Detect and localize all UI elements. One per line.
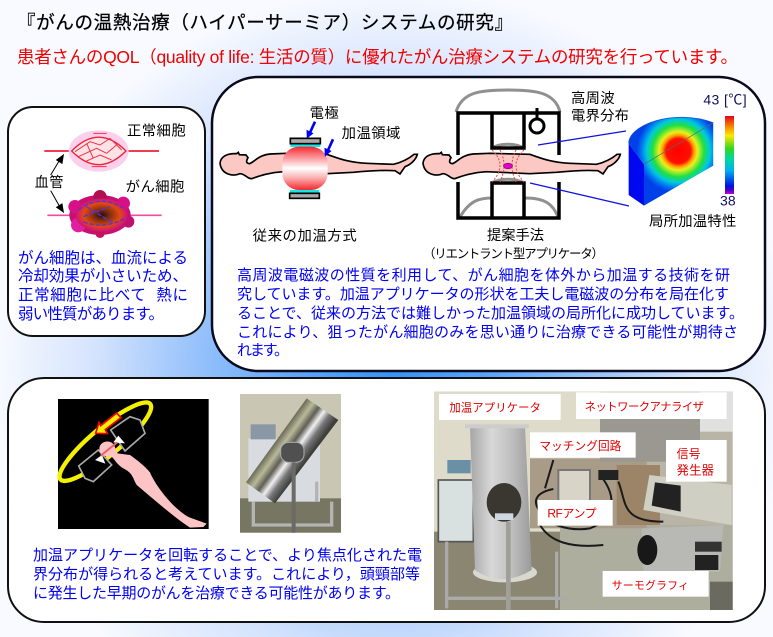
text: heating description: れます。	[237, 342, 289, 359]
title: 『がんの温熱治療（ハイパーサーミア）システムの研究』	[17, 12, 513, 33]
label: heating region: 加温領域	[342, 125, 400, 142]
RF amp and cables	[536, 460, 663, 546]
rotation ring	[51, 393, 159, 490]
caption: proposed method: （リエントラント型アプリケータ）	[423, 247, 604, 261]
callout: signal generator: 発生器	[677, 463, 715, 477]
text: heating description	[237, 266, 744, 359]
thermography camera	[637, 525, 723, 573]
rotation arrow	[96, 413, 121, 434]
image: rotation schematic	[51, 393, 209, 529]
text: rotation description: 界分布が得られると考えています。これにより，頭頸部等	[33, 565, 420, 583]
panel: rotating applicator	[8, 378, 765, 622]
cancer cell	[47, 190, 162, 238]
text: cancer cell explanation: がん細胞は、血流による	[18, 249, 188, 267]
callout: RF amplifier: RFアンプ	[547, 506, 597, 520]
label: cancer cell: がん細胞	[126, 179, 184, 196]
heating region	[282, 147, 328, 190]
patient body	[220, 152, 417, 179]
oscilloscope	[643, 475, 732, 525]
label: RF field	[571, 90, 629, 125]
subtitle: 患者さんのQOL（quality of life: 生活の質）に優れたがん治療システムの研究を行っています。	[17, 47, 738, 67]
diagram: proposed re-entrant applicator	[423, 90, 629, 261]
text: rotation description: 加温アプリケータを回転することで、より焦点化された電	[33, 547, 422, 564]
callout: network analyzer: ネットワークアナライザ	[585, 401, 704, 414]
label: RF field: 電界分布	[571, 108, 629, 125]
label: electrode: 電極	[310, 105, 339, 122]
heat model	[628, 116, 714, 206]
caption: proposed method	[423, 227, 604, 261]
callout: heating applicator	[439, 394, 561, 420]
diagram: normal and cancer cells	[35, 122, 186, 238]
patient body	[423, 152, 620, 179]
body silhouette	[99, 441, 207, 528]
label: local heating: 局所加温特性	[649, 213, 736, 230]
text: rotation description	[33, 547, 422, 602]
heating field	[492, 150, 524, 182]
text: heating description: ることで、従来の方法では難しかった加温領域の局所化に成功しています。	[237, 305, 744, 322]
callout: matching circuit: マッチング回路	[539, 439, 622, 453]
text: heating description: これにより、狙ったがん細胞のみを思い通りに治療できる可能性が期待さ	[237, 324, 738, 341]
electrodes	[290, 138, 320, 198]
label: blood vessel: 血管	[35, 174, 63, 190]
scale labels	[703, 91, 747, 208]
callout: network analyzer	[576, 392, 727, 419]
callout: RF amplifier	[538, 500, 613, 526]
callout: signal generator: 信号	[677, 447, 701, 461]
normal cell	[44, 130, 159, 172]
color scale	[725, 116, 734, 194]
text: cancer cell explanation	[18, 249, 188, 323]
domes	[456, 90, 560, 217]
loop antenna	[530, 108, 544, 133]
caption: conventional method: 従来の加温方式	[253, 227, 357, 244]
label: RF field: 高周波	[571, 90, 615, 107]
callout: matching circuit	[530, 432, 636, 458]
text: rotation description: に発生した早期のがんを治療できる可能性があります。	[33, 585, 400, 602]
aluminium applicator	[438, 424, 567, 610]
callout: heating applicator: 加温アプリケータ	[449, 401, 541, 415]
applicator frame	[458, 113, 559, 218]
photo: experimental system	[434, 392, 733, 610]
text: heating description: 高周波電磁波の性質を利用して、がん細胞を体外から加温する技術を研	[237, 266, 730, 284]
caption: proposed method: 提案手法	[487, 227, 544, 244]
text: cancer cell explanation: 正常細胞に比べて 熱に	[18, 286, 188, 304]
callout: thermography	[603, 571, 709, 597]
text: heating description: 究しています。加温アプリケータの形状を工夫し電磁波の分布を局在化す	[237, 286, 729, 303]
scale labels: 38	[720, 192, 736, 208]
panel: cancer cells vs normal cells	[8, 107, 205, 336]
photo: rotating applicator	[240, 394, 341, 533]
label: normal cell: 正常細胞	[127, 122, 186, 139]
callout: signal generator	[666, 440, 727, 482]
callout: thermography: サーモグラフィ	[612, 578, 689, 592]
heated spot	[504, 163, 512, 169]
leader lines	[530, 131, 629, 206]
diagram: conventional heating	[220, 105, 417, 244]
heating beam	[95, 436, 125, 464]
applicators	[79, 417, 145, 482]
text: cancer cell explanation: 冷却効果が小さいため、	[18, 267, 188, 285]
panel: heating method	[212, 77, 765, 371]
arrows: blood vessel	[51, 155, 63, 212]
text: cancer cell explanation: 弱い性質があります。	[18, 305, 164, 323]
arrows: labels	[307, 122, 333, 156]
diagram: thermal distribution	[571, 90, 747, 230]
scale labels: 43 [℃]	[703, 91, 747, 107]
